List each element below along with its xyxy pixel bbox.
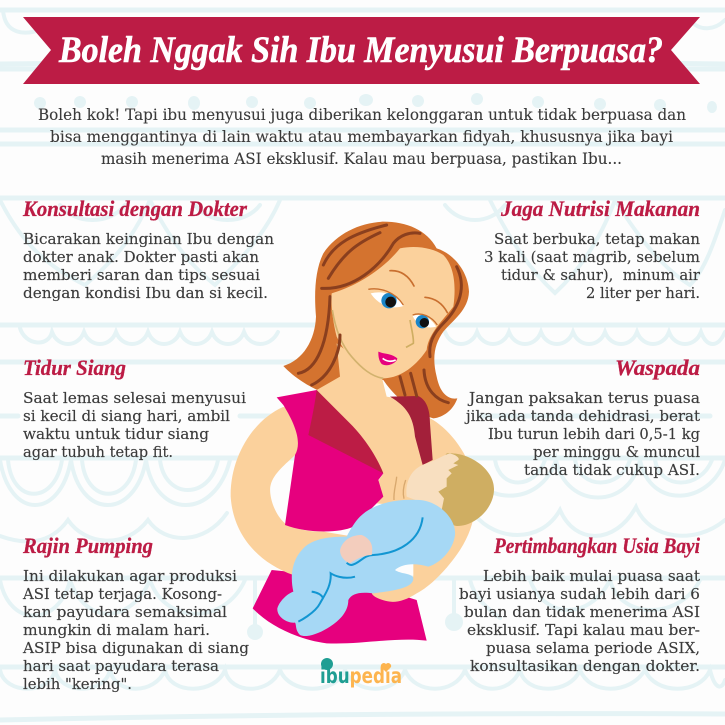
body text: hari saat payudara terasa [23, 657, 219, 675]
dress lapel [308, 390, 383, 473]
dress strap [390, 396, 433, 465]
body text [23, 389, 246, 461]
body text: mungkin di malam hari. [23, 621, 210, 639]
lips [378, 352, 397, 365]
body text: 3 kali (saat magrib, sebelum [484, 248, 700, 266]
body text: Lebih baik mulai puasa saat [483, 567, 700, 585]
body text: jika ada tanda dehidrasi, berat [464, 407, 700, 425]
body text: Ibu turun lebih dari 0,5-1 kg [488, 425, 700, 443]
body text: per minggu & muncul [533, 443, 700, 461]
panel: tidur siang [23, 355, 246, 461]
intro text [38, 105, 686, 168]
heading: Waspada [615, 355, 700, 380]
body text: ASI tetap terjaga. Kosong- [22, 585, 222, 603]
hair [283, 222, 469, 418]
body text: agar tubuh tetap fit. [23, 443, 173, 461]
body text: dengan kondisi Ibu dan si kecil. [23, 284, 268, 302]
body text: kan payudara semaksimal [23, 603, 227, 621]
body text: Ini dilakukan agar produksi [23, 567, 237, 585]
body text: eksklusif. Tapi kalau mau ber- [467, 621, 700, 639]
panel: waspada [464, 355, 700, 479]
body text: Saat lemas selesai menyusui [23, 389, 246, 407]
neck and chest [317, 343, 453, 510]
body text: Bicarakan keinginan Ibu dengan [23, 230, 274, 248]
body text [22, 567, 249, 693]
baby hair [413, 453, 494, 526]
title: Boleh Nggak Sih Ibu Menyusui Berpuasa? [58, 30, 663, 71]
body text [484, 230, 701, 302]
hair strands [298, 225, 461, 403]
eyebrows [390, 271, 447, 313]
illustration: breastfeeding mother [231, 222, 494, 644]
intro text: Boleh kok! Tapi ibu menyusui juga diberikan kelonggaran untuk tidak berpuasa dan [38, 105, 686, 124]
heading: Jaga Nutrisi Makanan [500, 196, 700, 221]
panel: jaga nutrisi makanan [484, 196, 701, 302]
body text: lebih "kering". [23, 675, 132, 693]
intro text: bisa menggantinya di lain waktu atau membayarkan fidyah, khususnya jika bayi [50, 127, 673, 146]
body text: 2 liter per hari. [586, 284, 700, 302]
body text [459, 567, 700, 675]
body text: si kecil di siang hari, ambil [23, 407, 230, 425]
breast creases [394, 477, 406, 500]
body text: bulan dan tidak menerima ASI [464, 603, 700, 621]
body text: konsultasikan dengan dokter. [470, 657, 700, 675]
baby hand [340, 535, 372, 563]
baby blanket [277, 500, 455, 636]
body text: ASIP bisa digunakan di siang [22, 639, 249, 657]
body text: waktu untuk tidur siang [23, 425, 209, 443]
blanket folds [298, 517, 423, 622]
heading: Tidur Siang [23, 355, 126, 380]
heading: Rajin Pumping [22, 533, 153, 558]
body text: memberi saran dan tips sesuai [23, 266, 260, 284]
body text: bayi usianya sudah lebih dari 6 [459, 585, 700, 603]
nose [406, 320, 413, 347]
heading: Konsultasi dengan Dokter [22, 196, 247, 221]
body text [23, 230, 274, 302]
upper dress [277, 390, 383, 531]
face [331, 247, 455, 378]
body text: puasa selama periode ASIX, [486, 639, 700, 657]
heading: Pertimbangkan Usia Bayi [493, 533, 701, 558]
logo: ibupedia: ibupedia [320, 664, 402, 688]
intro text: masih menerima ASI eksklusif. Kalau mau berpuasa, pastikan Ibu... [101, 149, 622, 168]
body text [464, 389, 700, 479]
left arm [231, 407, 353, 575]
lower dress [253, 570, 427, 644]
panel: konsultasi dengan dokter [22, 196, 274, 302]
title banner [23, 17, 700, 84]
body text: Saat berbuka, tetap makan [494, 230, 700, 248]
panel: pertimbangkan usia bayi [459, 533, 701, 675]
body text: Jangan paksakan terus puasa [467, 389, 700, 407]
body text: tidur & sahur), minum air [501, 266, 701, 284]
left eye [368, 289, 403, 308]
body text: tanda tidak cukup ASI. [524, 461, 700, 479]
right arm [372, 418, 475, 602]
jaw line [332, 310, 383, 378]
panel: rajin pumping [22, 533, 249, 693]
body text: dokter anak. Dokter pasti akan [23, 248, 259, 266]
baby face [406, 453, 459, 510]
right eye [413, 314, 437, 328]
